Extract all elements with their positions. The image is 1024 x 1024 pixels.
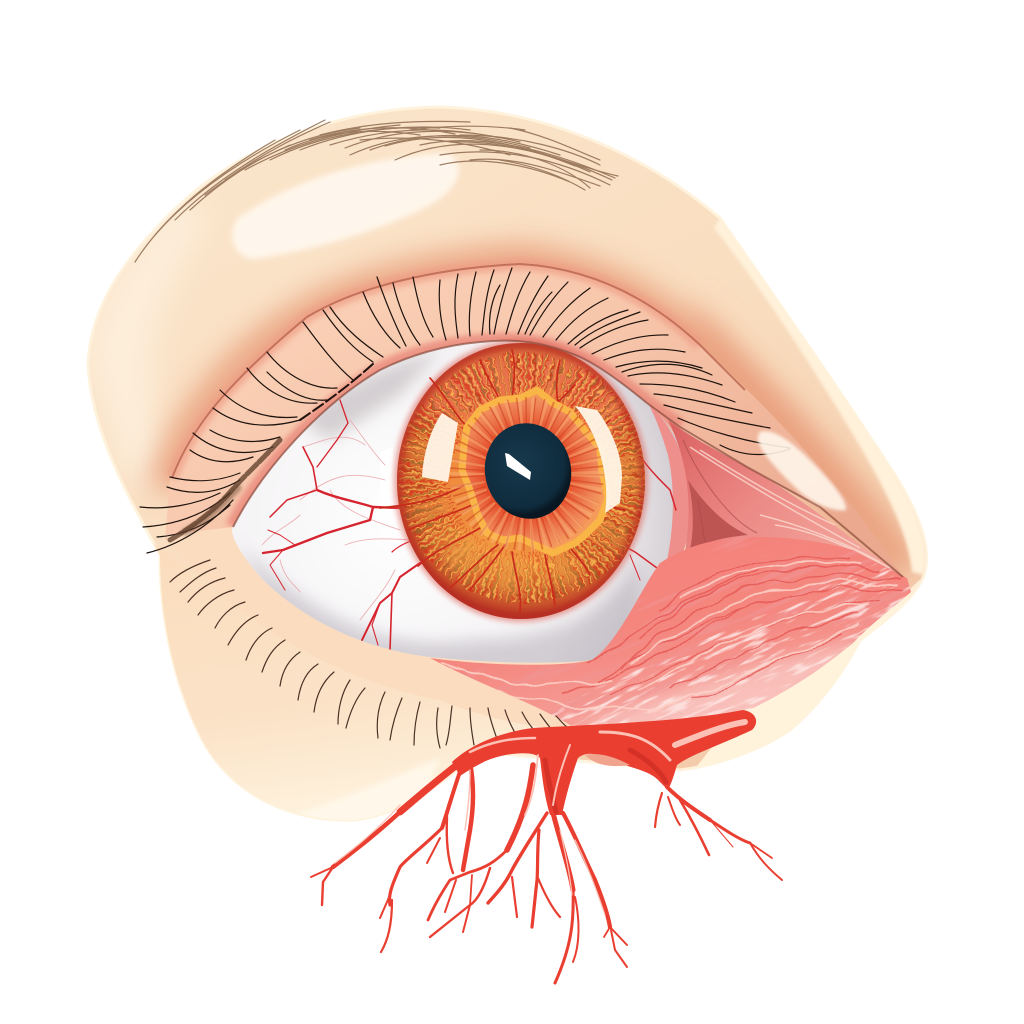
trunk inner skin gap [585,754,630,766]
vessel trunk [452,710,756,815]
red vessel tree [311,710,782,983]
lash root clump [170,362,375,540]
caruncle and inner corner tissue [668,420,905,578]
lid crease line [172,264,745,478]
iris [380,340,648,622]
vessel highlights [335,722,745,915]
dark pocket [688,480,748,550]
eighth branch [563,813,610,927]
tissue marbling [467,538,910,726]
brow highlight [232,153,459,259]
jagged collarette [462,390,608,553]
third branch [463,762,473,870]
eye illustration [86,106,928,984]
upper eyelid margin [233,341,903,577]
pink limbus band [649,405,689,558]
second branch [442,763,463,828]
right side lid shading [692,305,858,542]
upper eyelid fold [165,264,903,577]
upper lashes [140,268,790,553]
salmon upper iris [418,348,624,437]
pupil glint [505,453,531,480]
eyeball shading [244,552,644,663]
nose-side highlight [758,431,846,510]
skin: brow and eyelid mass [88,107,935,840]
pupil [476,415,580,527]
iris reflections [422,413,458,482]
eyeball [232,341,692,680]
eyebrow hairs [135,120,618,262]
seventh branch [553,813,573,890]
faint sclera vessels [262,420,420,620]
left main branch [400,764,458,812]
cream right rim [714,218,926,575]
crease shadow on brow [165,262,905,570]
lower lashes [170,560,568,748]
right branch [667,787,710,820]
inner iris spokes [467,414,587,534]
conjunctiva [430,537,911,726]
sclera highlight [380,447,393,507]
sixth branch [532,830,539,927]
sclera vessels [263,400,676,650]
iris red veins [380,350,625,612]
fifth branch [488,813,547,903]
fourth branch [507,765,533,850]
vessel shading [545,750,666,812]
iris fibres [419,373,629,583]
lower eyelid rim [165,527,592,728]
